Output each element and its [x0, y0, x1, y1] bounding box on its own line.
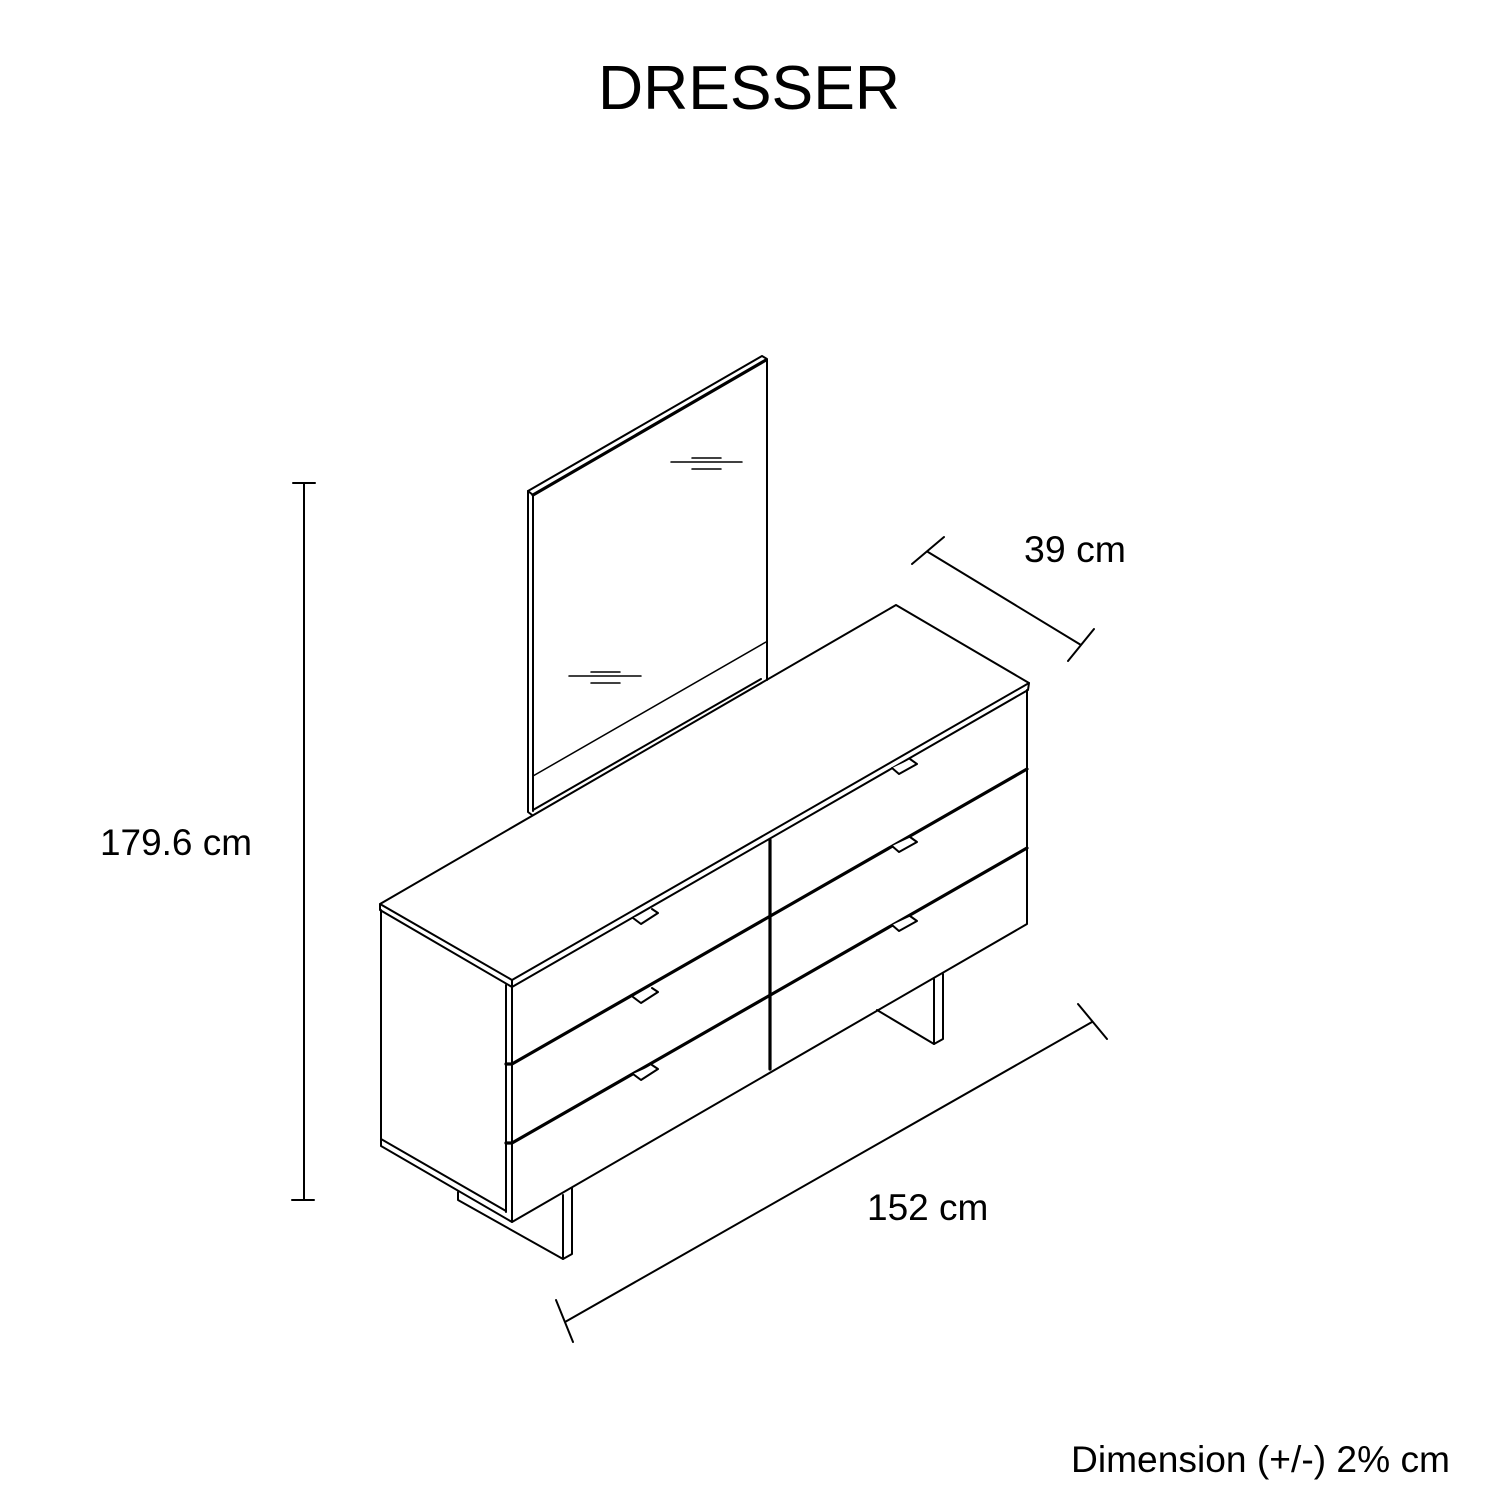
dresser top front edge: [380, 683, 1029, 987]
front panel: [512, 690, 1027, 1222]
left leg: [458, 1188, 572, 1259]
mirror reflection mark lower: [569, 672, 641, 683]
dresser: [380, 605, 1029, 1259]
tolerance note: Dimension (+/-) 2% cm: [1071, 1439, 1450, 1480]
mirror reflection mark upper: [671, 458, 742, 469]
height dimension line: [292, 483, 315, 1200]
drawer dividers: [506, 769, 1027, 1143]
title: DRESSER: [598, 53, 900, 123]
side panel: [381, 910, 512, 1222]
width dimension line: [556, 1004, 1107, 1342]
mirror glass edge: [533, 642, 766, 776]
drawer handles right column: [892, 759, 917, 931]
depth label: 39 cm: [1024, 529, 1126, 570]
drawer handles left column: [633, 909, 658, 1080]
mirror: [528, 356, 767, 815]
right leg: [877, 974, 943, 1044]
height label: 179.6 cm: [100, 822, 252, 863]
dresser top surface: [380, 605, 1029, 987]
mirror frame: [528, 356, 767, 815]
width label: 152 cm: [867, 1187, 988, 1228]
depth dimension line: [912, 537, 1094, 661]
